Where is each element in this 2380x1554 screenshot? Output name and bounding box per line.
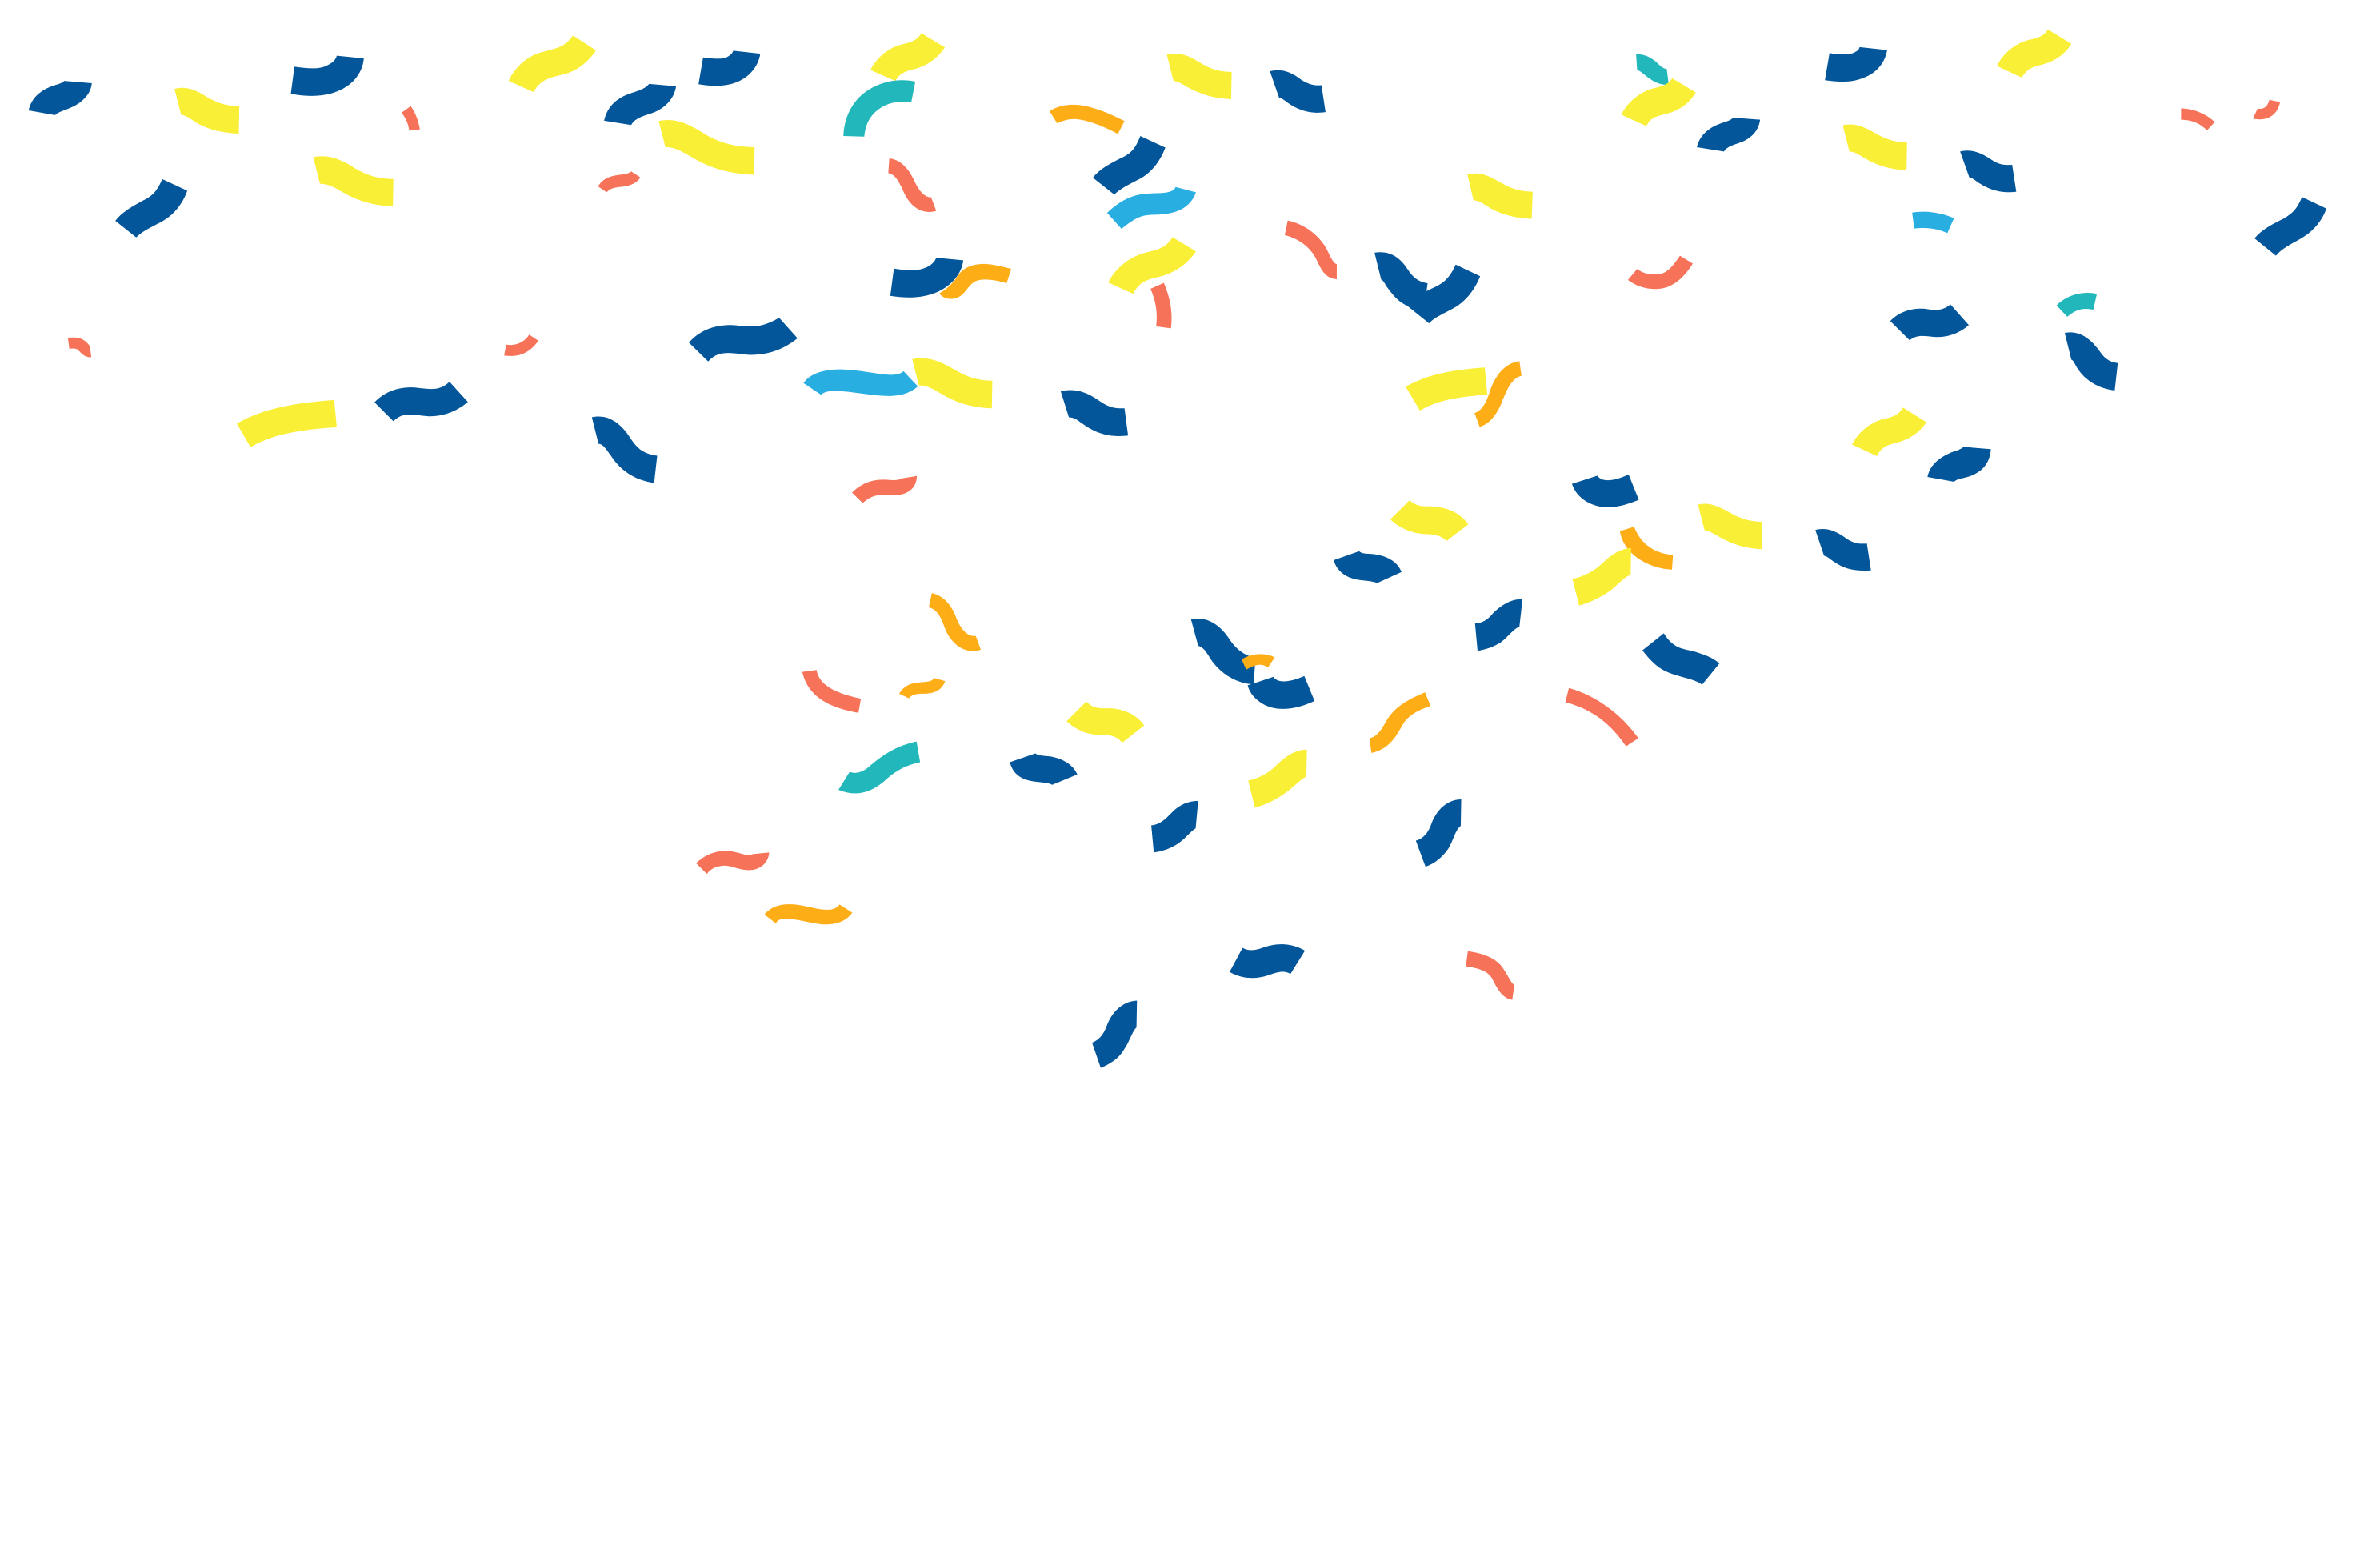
confetti: yellow: [237, 400, 337, 447]
confetti: navy: [1270, 70, 1326, 113]
confetti: coral: [1285, 221, 1337, 279]
confetti: yellow: [174, 88, 239, 134]
confetti: navy: [1010, 754, 1078, 785]
confetti: sky blue: [803, 370, 918, 396]
confetti: navy: [1061, 390, 1128, 436]
confetti: yellow: [314, 156, 394, 206]
confetti: coral: [1628, 256, 1693, 289]
confetti: navy: [1890, 305, 1969, 340]
confetti: yellow: [509, 35, 596, 92]
confetti: coral: [598, 171, 640, 192]
confetti: amber: [899, 678, 945, 699]
confetti: teal: [1636, 54, 1669, 85]
confetti: navy: [1151, 801, 1198, 852]
confetti: yellow: [1066, 701, 1144, 743]
confetti: navy: [1416, 799, 1462, 867]
confetti: navy: [1927, 447, 1990, 481]
confetti: navy: [2254, 197, 2326, 256]
confetti: navy: [1334, 551, 1402, 583]
confetti: teal: [2057, 293, 2097, 317]
confetti: navy: [689, 318, 798, 362]
confetti: yellow: [1573, 548, 1631, 606]
confetti: coral: [68, 338, 91, 357]
confetti: sky blue: [1107, 187, 1196, 229]
confetti: yellow: [912, 358, 992, 408]
confetti: coral: [1466, 951, 1514, 999]
confetti: navy: [291, 56, 364, 96]
confetti: navy: [115, 179, 187, 238]
confetti: navy: [374, 382, 468, 421]
confetti: coral: [2181, 109, 2214, 130]
confetti: teal: [843, 80, 915, 137]
confetti: navy: [1230, 944, 1305, 978]
confetti: amber: [939, 264, 1011, 299]
confetti: navy: [2065, 332, 2118, 391]
confetti: yellow: [1390, 500, 1468, 541]
confetti: navy: [890, 258, 963, 298]
confetti: navy overlapping pair: [1191, 619, 1314, 709]
confetti: teal: [838, 742, 920, 793]
confetti: coral: [1566, 688, 1638, 747]
confetti: yellow: [658, 120, 754, 174]
confetti: navy: [1825, 47, 1887, 82]
confetti: yellow: [1622, 78, 1696, 126]
confetti: yellow: [1467, 174, 1533, 219]
confetti: coral: [696, 851, 769, 874]
confetti: navy: [1960, 150, 2016, 192]
confetti: yellow: [1852, 407, 1926, 456]
confetti: navy: [1697, 118, 1760, 151]
confetti: navy: [1093, 136, 1166, 194]
confetti: amber: [1242, 654, 1274, 670]
confetti: navy: [1815, 529, 1871, 571]
confetti: yellow: [1248, 750, 1307, 807]
confetti: navy: [1642, 633, 1719, 685]
confetti: amber: [929, 593, 981, 651]
confetti: navy: [29, 81, 92, 115]
confetti: navy: [1572, 475, 1639, 507]
confetti: amber: [1474, 361, 1522, 427]
confetti: amber: [1050, 105, 1125, 134]
confetti: coral: [852, 476, 917, 503]
confetti: amber: [1370, 692, 1430, 753]
confetti: yellow: [1698, 503, 1762, 549]
confetti: amber: [765, 904, 852, 924]
confetti: sky blue: [1912, 212, 1954, 233]
confetti: navy: [604, 84, 676, 125]
confetti: navy overlapping pair: [1374, 252, 1480, 323]
confetti: yellow: [1406, 367, 1487, 411]
confetti: coral: [504, 334, 538, 356]
confetti: coral: [402, 106, 420, 130]
confetti: coral: [1150, 283, 1171, 328]
confetti: yellow: [1108, 237, 1196, 294]
confetti: navy: [1092, 1000, 1137, 1068]
confetti: yellow: [1997, 30, 2071, 78]
confetti: yellow: [1842, 124, 1907, 170]
confetti: coral: [802, 670, 861, 713]
confetti: navy: [698, 50, 760, 86]
confetti: yellow: [870, 33, 945, 81]
confetti: navy: [1475, 599, 1522, 651]
confetti: navy: [1928, 447, 1991, 482]
confetti: navy: [592, 417, 657, 483]
confetti: amber: [1620, 527, 1673, 570]
confetti: coral: [888, 158, 936, 212]
confetti: navy: [1230, 944, 1305, 978]
confetti: coral: [2253, 100, 2280, 119]
confetti: yellow: [1167, 54, 1232, 99]
